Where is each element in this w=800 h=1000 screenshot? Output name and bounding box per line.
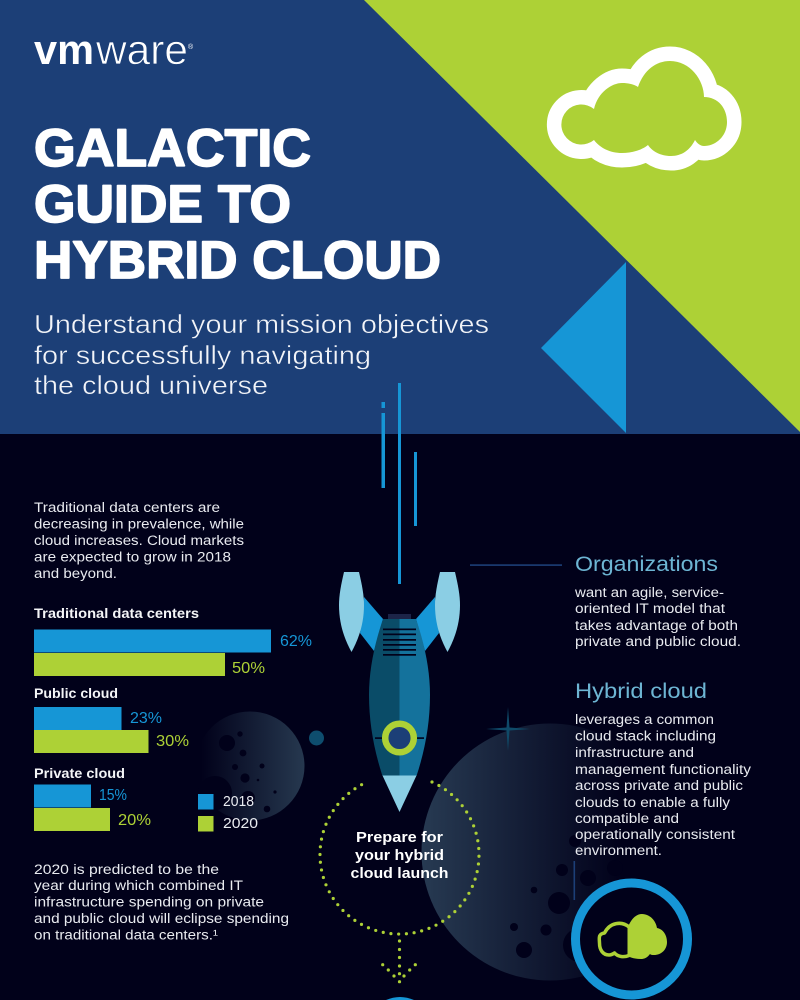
small moon xyxy=(196,712,304,820)
chart group: traditional data centers xyxy=(34,606,312,677)
chart group: public cloud: Public cloud xyxy=(34,686,118,701)
text: prediction: and public cloud will eclipse spending xyxy=(34,911,289,926)
text: hybrid cloud: cloud stack including xyxy=(575,728,716,744)
title xyxy=(34,119,441,290)
text: organizations: private and public cloud. xyxy=(575,634,741,649)
green triangle xyxy=(364,0,800,432)
icon: half-filled cloud xyxy=(599,914,667,959)
text: organizations xyxy=(574,585,741,649)
legend: 2020 xyxy=(223,815,258,832)
vmware logo xyxy=(34,26,194,73)
text: prediction xyxy=(34,862,289,942)
text: hybrid cloud: management functionality xyxy=(575,762,751,777)
text: hybrid cloud: clouds to enable a fully xyxy=(575,795,730,810)
title: GALACTIC xyxy=(34,119,311,178)
rocket cap xyxy=(388,614,411,620)
text: organizations: want an agile, service- xyxy=(574,585,724,600)
text: prepare for launch xyxy=(350,830,448,882)
text: prediction: year during which combined IT xyxy=(34,878,243,893)
text: hybrid cloud: across private and public xyxy=(575,778,743,793)
text: hybrid cloud xyxy=(575,712,751,858)
chart group: private cloud: 20% xyxy=(118,812,151,829)
subtitle xyxy=(34,309,489,400)
dotted circle xyxy=(320,782,479,934)
subtitle: the cloud universe xyxy=(34,370,268,400)
rocket vents xyxy=(383,628,416,656)
rocket body right half xyxy=(400,619,430,776)
text: prediction: 2020 is predicted to be the xyxy=(34,862,219,877)
text: organizations: oriented IT model that xyxy=(575,601,725,616)
chart group: public cloud: 30% xyxy=(156,733,189,750)
cloud outline half xyxy=(599,923,629,957)
panel: header background xyxy=(0,0,800,434)
text: hybrid cloud: infrastructure and xyxy=(575,745,694,760)
text: prepare for launch: cloud launch xyxy=(350,866,448,882)
chart group: private cloud: Private cloud xyxy=(34,766,125,781)
chart group: public cloud: 23% xyxy=(130,710,162,727)
small teal planet xyxy=(309,730,324,746)
text: hybrid cloud: operationally consistent xyxy=(575,827,735,842)
rocket window xyxy=(385,724,414,752)
text: hybrid cloud: environment. xyxy=(575,843,662,858)
rocket fins xyxy=(339,572,460,652)
text: intro: are expected to grow in 2018 xyxy=(34,550,231,564)
vmware logo: vm xyxy=(34,26,94,73)
text: intro xyxy=(34,500,244,581)
heading: hybrid cloud: Hybrid cloud xyxy=(575,680,707,703)
rocket crossbar xyxy=(375,737,424,739)
next ring, cropped at the page bottom xyxy=(386,997,414,1000)
text: intro: Traditional data centers are xyxy=(34,500,220,515)
arrow: dotted down xyxy=(381,939,417,983)
text: prepare for launch: Prepare for xyxy=(356,830,443,846)
vmware logo: ware xyxy=(95,26,188,73)
legend xyxy=(198,793,258,832)
vmware logo: ® xyxy=(188,43,194,51)
heading: organizations: Organizations xyxy=(575,553,718,576)
text: prediction: on traditional data centers.¹ xyxy=(34,928,219,942)
icon: hybrid cloud ring xyxy=(576,883,688,995)
chart group: traditional data centers: Traditional data centers xyxy=(34,606,199,621)
text: intro: and beyond. xyxy=(34,566,117,581)
icon: star xyxy=(486,707,530,751)
text: organizations: takes advantage of both xyxy=(575,618,738,633)
cloud filled half xyxy=(628,914,667,959)
subtitle: Understand your mission objectives xyxy=(34,309,489,339)
large moon xyxy=(422,724,678,980)
blue triangle xyxy=(541,262,626,433)
title: HYBRID CLOUD xyxy=(34,231,441,290)
bar chart xyxy=(34,606,312,831)
chart group: public cloud xyxy=(34,686,189,753)
rocket wings xyxy=(360,597,439,651)
text: prepare for launch: your hybrid xyxy=(355,848,444,864)
text: hybrid cloud: compatible and xyxy=(575,811,679,826)
chart group: traditional data centers: 50% xyxy=(232,660,265,677)
connector: hybrid cloud xyxy=(574,861,575,900)
chart group: private cloud xyxy=(34,766,151,831)
rocket xyxy=(339,572,460,812)
text: hybrid cloud: leverages a common xyxy=(575,712,714,727)
rocket body left half xyxy=(369,619,400,776)
text: intro: decreasing in prevalence, while xyxy=(34,516,244,532)
legend: 2018 xyxy=(223,793,254,810)
chart group: traditional data centers: 62% xyxy=(280,633,312,650)
icon: white cloud xyxy=(561,61,727,156)
chart group: private cloud: 15% xyxy=(99,787,127,804)
text: intro: cloud increases. Cloud markets xyxy=(34,533,244,548)
title: GUIDE TO xyxy=(34,175,291,234)
connector: organizations xyxy=(470,564,562,566)
rocket nose xyxy=(382,776,416,812)
subtitle: for successfully navigating xyxy=(34,340,371,370)
rocket exhaust streaks xyxy=(382,383,417,584)
text: prediction: infrastructure spending on private xyxy=(34,894,264,910)
